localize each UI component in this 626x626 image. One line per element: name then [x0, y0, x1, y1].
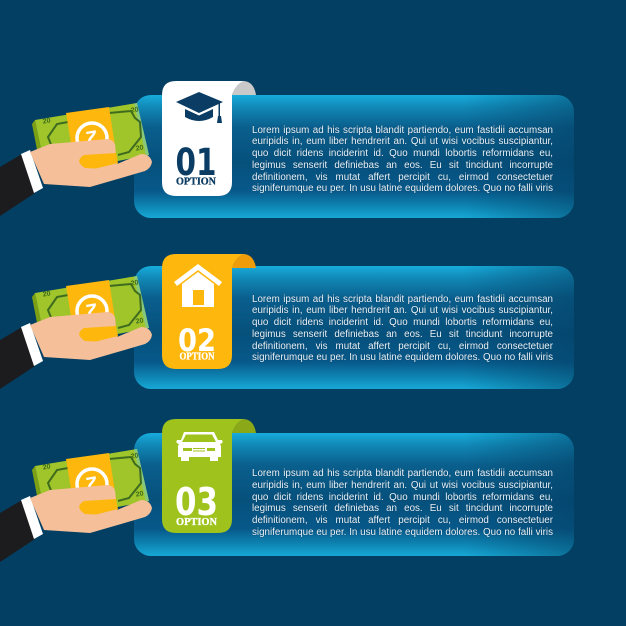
tab: option 1: [162, 81, 256, 196]
number: 03: 03: [175, 480, 218, 524]
text block: option 3: definitionem, vis mutat affert percipit cu, eirmod consectetuer: [252, 515, 553, 526]
label: option: OPTION: [180, 352, 215, 362]
tab body: option 1: [162, 81, 244, 196]
panel: option 3 banner: [134, 433, 574, 556]
hand holding money: option 2: [0, 276, 152, 389]
icon: graduation cap: [176, 92, 223, 123]
label: option: OPTION: [176, 176, 217, 188]
hand holding money: option 1: 20: [42, 117, 51, 126]
text block: option 3: legimus senserit definiebas an eos. Eu sit tincidunt incorrupte: [252, 503, 553, 514]
text block: option 1: quo dicit ridens inciderint id. Quo mundi lobortis reformidans eu,: [252, 148, 553, 159]
tab: option 2: [162, 254, 256, 369]
text block: option 3: [252, 468, 553, 538]
hand holding money: option 3: 20: [135, 490, 144, 499]
icon: car: [176, 432, 223, 461]
text block: option 3: euripidis in, eum liber hendrerit an. Qui ut wisi vocibus suscipiantur,: [252, 480, 553, 491]
text block: option 3: quo dicit ridens inciderint id. Quo mundi lobortis reformidans eu,: [252, 492, 553, 503]
hand holding money: option 2: 20: [42, 290, 51, 299]
number: 01: 01: [176, 141, 216, 184]
hand holding money: option 2: 20: [135, 317, 144, 326]
number: 02: 02: [178, 323, 216, 359]
hand holding money: option 3: [0, 449, 152, 562]
tab body: option 2: [162, 254, 244, 369]
hand holding money: option 3: 20: [42, 463, 51, 472]
label: option: OPTION: [176, 517, 218, 528]
text block: option 2: Lorem ipsum ad his scripta blandit partiendo, eum fastidii accumsan: [252, 294, 553, 304]
text block: option 2: quo dicit ridens inciderint id. Quo mundi lobortis reformidans eu,: [252, 317, 553, 328]
text block: option 2: definitionem, vis mutat affert percipit cu, eirmod consectetuer: [252, 341, 553, 352]
panel: option 2 banner: [134, 266, 574, 389]
text block: option 2: [252, 294, 553, 363]
hand holding money: option 1: [0, 103, 152, 216]
hand holding money: option 1: 20: [135, 144, 144, 153]
hand holding money: option 1: 2: [84, 125, 99, 149]
text block: option 1: definitionem, vis mutat affert percipit cu, eirmod consectetuer: [252, 172, 553, 183]
hand holding money: option 1: 20: [130, 106, 139, 115]
text block: option 2: legimus senserit definiebas an eos. Eu sit tincidunt incorrupte: [252, 329, 553, 340]
text block: option 1: legimus senserit definiebas an eos. Eu sit tincidunt incorrupte: [252, 160, 553, 171]
tab: option 3: [162, 419, 256, 533]
tab body: option 3: [162, 419, 244, 533]
curl: option 3: [232, 419, 256, 433]
text block: option 2: euripidis in, eum liber hendrerit an. Qui ut wisi vocibus suscipiantur,: [252, 305, 553, 316]
text block: option 1: euripidis in, eum liber hendrerit an. Qui ut wisi vocibus suscipiantur,: [252, 136, 553, 147]
curl: option 1: [232, 81, 256, 95]
icon: house: [174, 264, 222, 307]
hand holding money: option 2: 2: [84, 298, 99, 322]
text block: option 3: Lorem ipsum ad his scripta blandit partiendo, eum fastidii accumsan: [252, 468, 553, 479]
text block: option 1: [252, 124, 553, 194]
text block: option 1: Lorem ipsum ad his scripta blandit partiendo, eum fastidii accumsan: [252, 124, 553, 136]
hand holding money: option 3: 2: [84, 471, 99, 495]
text block: option 2: signiferumque eu per. In usu latine equidem dolores. Quo no falli viris: [252, 352, 553, 363]
hand holding money: option 2: 20: [130, 279, 139, 288]
text block: option 3: signiferumque eu per. In usu latine equidem dolores. Quo no falli viris: [252, 527, 553, 538]
text block: option 1: signiferumque eu per. In usu latine equidem dolores. Quo no falli viris: [252, 183, 553, 194]
panel: option 1 banner: [134, 95, 574, 218]
curl: option 2: [232, 254, 256, 268]
hand holding money: option 3: 20: [130, 452, 139, 461]
